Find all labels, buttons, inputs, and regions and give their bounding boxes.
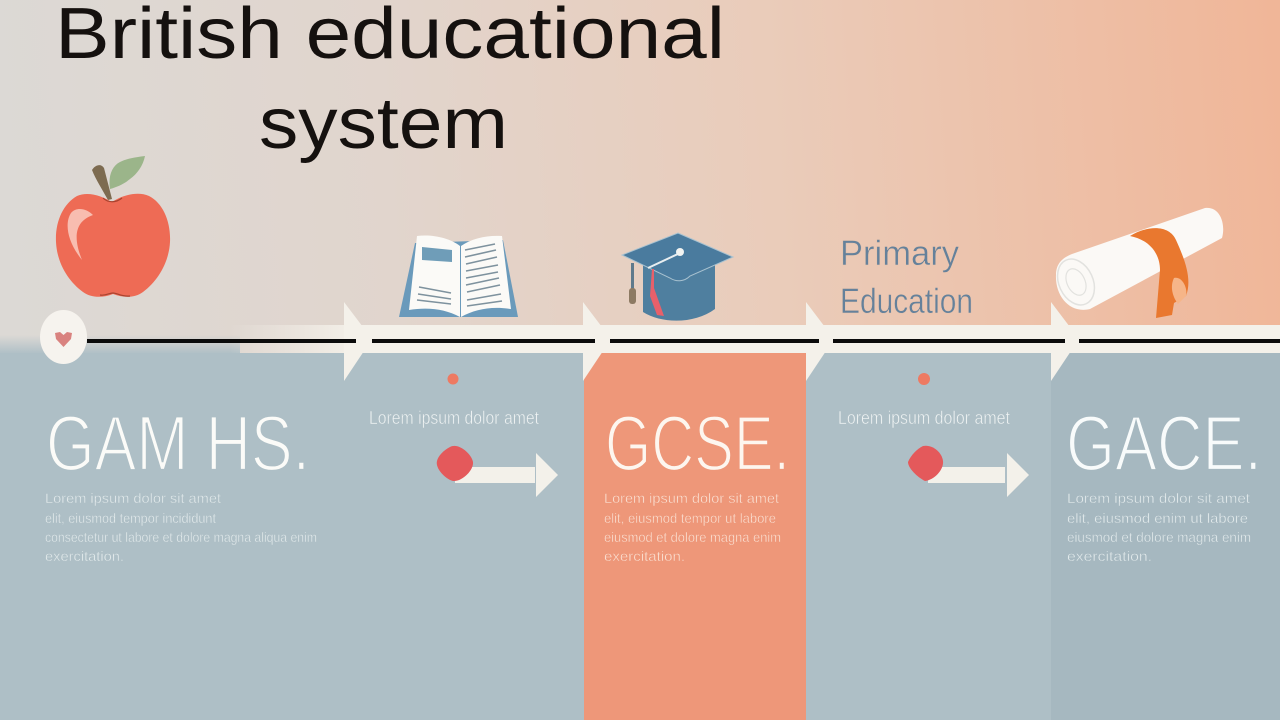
column 3 body text	[604, 490, 781, 564]
icon: open book	[399, 235, 518, 317]
column 3 body text: elit, eiusmod tempor ut labore	[604, 510, 776, 526]
column 3 heading: GCSE.	[605, 399, 790, 487]
cap top board	[622, 233, 733, 281]
book cover	[399, 240, 518, 317]
cap button and cord	[648, 253, 680, 268]
panel: GCSE	[584, 353, 806, 720]
apple highlight	[68, 209, 93, 260]
timeline start marker with heart	[40, 310, 87, 364]
column 5 body text: elit, eiusmod enim ut labore	[1067, 510, 1248, 526]
book picture	[422, 247, 452, 262]
book right page	[461, 236, 511, 317]
apple notch shadows	[100, 198, 130, 296]
column 1 heading: GAM HS.	[46, 399, 310, 487]
background: lower blue area	[0, 353, 1280, 720]
column 1 body text: exercitation.	[45, 548, 124, 564]
column 3 body text: Lorem ipsum dolor sit amet	[604, 490, 779, 506]
apple stem	[92, 165, 112, 200]
label: Primary Education: Primary	[840, 234, 959, 273]
column 1 body text: Lorem ipsum dolor sit amet	[45, 490, 221, 506]
column 1 body text: consectetur ut labore et dolore magna aliqua enim	[45, 529, 317, 545]
icon: graduation cap	[622, 233, 733, 321]
label: Primary Education	[840, 234, 973, 321]
column 1 body text	[45, 490, 317, 564]
column 2 arrow	[437, 446, 558, 497]
column 5 body text: Lorem ipsum dolor sit amet	[1067, 490, 1250, 506]
column 5 body text: eiusmod et dolore magna enim	[1067, 529, 1251, 545]
title: system	[259, 84, 508, 164]
column 4 caption: Lorem ipsum dolor amet	[838, 408, 1010, 428]
column 3 body text: exercitation.	[604, 548, 685, 564]
label: Primary Education: Education	[840, 282, 973, 321]
column 2 caption: Lorem ipsum dolor amet	[369, 408, 539, 428]
timeline band with arrows	[230, 302, 1280, 381]
orange ribbon	[1130, 228, 1188, 318]
background: upper gradient	[0, 0, 1280, 360]
icon: diploma scroll	[1050, 208, 1223, 318]
book text lines	[417, 244, 502, 306]
apple leaf	[109, 156, 145, 189]
red tassel	[650, 269, 664, 316]
column 5 body text	[1067, 490, 1251, 564]
column 4 dot	[918, 373, 930, 385]
column 1 body text: elit, eiusmod tempor incididunt	[45, 510, 216, 526]
column 4 arrow	[908, 446, 1029, 497]
background: left edge fade	[0, 335, 240, 354]
cap base	[643, 262, 715, 321]
left tassel	[631, 263, 634, 289]
scroll end rings	[1050, 253, 1102, 311]
ribbon highlight	[1172, 278, 1186, 304]
apple body	[56, 194, 170, 297]
scroll body	[1056, 208, 1223, 310]
column 5 body text: exercitation.	[1067, 548, 1152, 564]
column 2 dot	[448, 374, 458, 384]
book left page	[409, 235, 460, 317]
panel: GACE	[1051, 353, 1280, 720]
timeline black line segments	[87, 339, 1280, 343]
icon: apple	[56, 156, 170, 297]
column 3 body text: eiusmod et dolore magna enim	[604, 529, 781, 545]
title	[55, 0, 725, 164]
